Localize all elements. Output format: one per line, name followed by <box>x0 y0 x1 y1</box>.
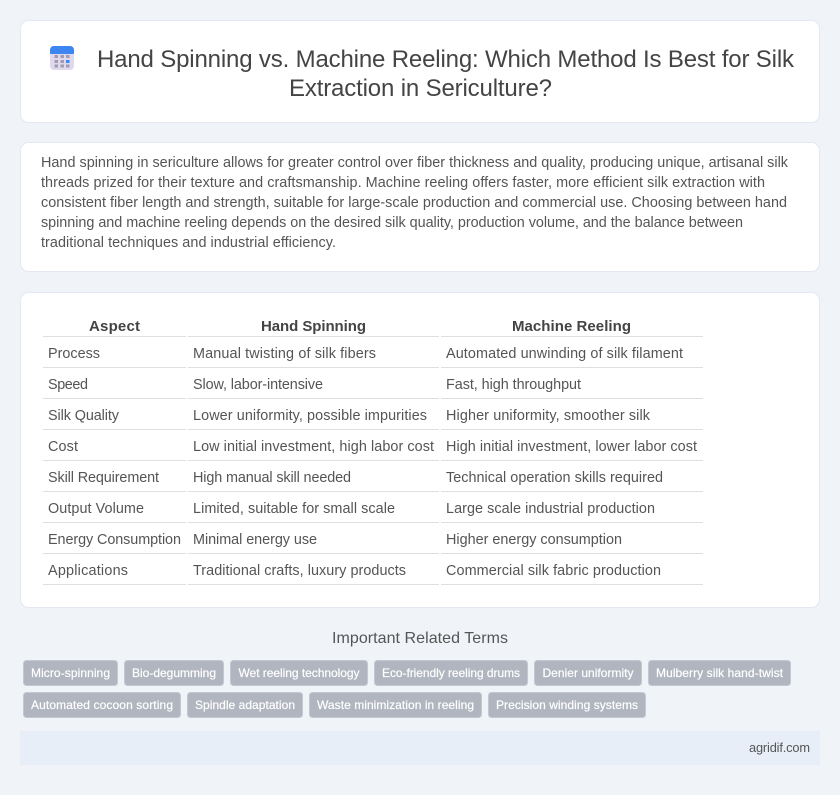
footer bar <box>20 731 820 765</box>
table header row: Machine Reeling <box>512 318 631 335</box>
related term tags <box>24 660 790 718</box>
icon: calendar grid <box>50 46 74 70</box>
table row: energy consumption: Minimal energy use <box>193 532 317 548</box>
tag: spindle adaptation <box>188 692 302 718</box>
description text: Hand spinning in sericulture allows for greater control over fiber thickness and quality, producing unique, artisanal silk <box>41 155 789 171</box>
tag: mulberry silk hand-twist: Mulberry silk hand-twist <box>656 666 784 680</box>
table row: output volume: Output Volume <box>48 501 144 517</box>
title text <box>97 46 795 102</box>
table row: speed: Speed <box>48 377 88 393</box>
panel: title header <box>20 20 820 122</box>
table row: energy consumption <box>48 532 622 548</box>
table row: output volume <box>48 501 655 517</box>
table row: output volume: Large scale industrial production <box>446 501 655 517</box>
panel: description <box>20 142 820 272</box>
heading: important related terms: Important Related Terms <box>332 630 508 647</box>
description text <box>41 155 789 251</box>
table row: energy consumption: Higher energy consumption <box>446 532 622 548</box>
table row: energy consumption: Energy Consumption <box>48 532 181 548</box>
table row: cost: High initial investment, lower labor cost <box>446 439 697 455</box>
table row: cost: Low initial investment, high labor cost <box>193 439 434 455</box>
table row: skill requirement: High manual skill needed <box>193 470 351 486</box>
table row: speed: Slow, labor-intensive <box>193 377 323 393</box>
table row: skill requirement: Technical operation skills required <box>446 470 663 486</box>
tag: eco-friendly reeling drums <box>374 660 528 686</box>
table row: output volume: Limited, suitable for small scale <box>193 501 395 517</box>
table row: applications: Traditional crafts, luxury products <box>193 563 406 579</box>
table row: silk quality <box>48 408 651 424</box>
description text: spinning and machine reeling depends on the desired silk quality, production volume, and the balance between <box>41 215 743 231</box>
table row: applications <box>48 563 661 579</box>
table row: speed: Fast, high throughput <box>446 377 581 393</box>
tag: wet reeling technology: Wet reeling technology <box>238 666 360 680</box>
tag: waste minimization in reeling: Waste minimization in reeling <box>317 698 474 712</box>
tag: denier uniformity <box>534 660 642 686</box>
table row: silk quality: Lower uniformity, possible impurities <box>193 408 427 424</box>
table row: silk quality: Higher uniformity, smoother silk <box>446 408 651 424</box>
title text: Hand Spinning vs. Machine Reeling: Which Method Is Best for Silk <box>97 46 795 73</box>
table header row: Aspect <box>89 318 140 335</box>
tag: eco-friendly reeling drums: Eco-friendly reeling drums <box>382 666 520 680</box>
table row: skill requirement <box>48 470 663 486</box>
tag: bio-degumming: Bio-degumming <box>132 666 216 680</box>
description text: consistent fiber length and strength, suitable for large-scale production and commercial use. Choosing between hand <box>41 195 787 211</box>
tag: denier uniformity: Denier uniformity <box>542 666 634 680</box>
tag: automated cocoon sorting <box>24 692 180 718</box>
table row: process: Process <box>48 346 100 362</box>
footer source text: agridif.com <box>749 740 810 755</box>
tag: mulberry silk hand-twist <box>648 660 790 686</box>
table header row: Hand Spinning <box>261 318 366 335</box>
table row: silk quality: Silk Quality <box>48 408 120 424</box>
table row: process: Automated unwinding of silk filament <box>446 346 683 362</box>
tag: micro-spinning <box>24 660 118 686</box>
tag: wet reeling technology <box>230 660 368 686</box>
title text: Extraction in Sericulture? <box>289 75 552 102</box>
tag: waste minimization in reeling <box>310 692 482 718</box>
table row: applications: Applications <box>48 563 128 579</box>
tag: spindle adaptation: Spindle adaptation <box>195 698 295 712</box>
table header row <box>89 318 631 335</box>
tag: automated cocoon sorting: Automated cocoon sorting <box>31 698 173 712</box>
table row: process <box>48 346 683 362</box>
table row: cost: Cost <box>48 439 78 455</box>
tag: micro-spinning: Micro-spinning <box>31 666 110 680</box>
description text: threads prized for their texture and craftsmanship. Machine reeling offers faster, more efficient silk extraction with <box>41 175 765 191</box>
table row: cost <box>48 439 697 455</box>
description text: traditional techniques and industrial efficiency. <box>41 235 336 251</box>
tag: precision winding systems: Precision winding systems <box>496 698 638 712</box>
table row: skill requirement: Skill Requirement <box>48 470 159 486</box>
table row: applications: Commercial silk fabric production <box>446 563 661 579</box>
panel: comparison table <box>20 292 820 608</box>
table row: speed <box>48 377 581 393</box>
tag: precision winding systems <box>488 692 646 718</box>
table row: process: Manual twisting of silk fibers <box>193 346 376 362</box>
tag: bio-degumming <box>124 660 224 686</box>
